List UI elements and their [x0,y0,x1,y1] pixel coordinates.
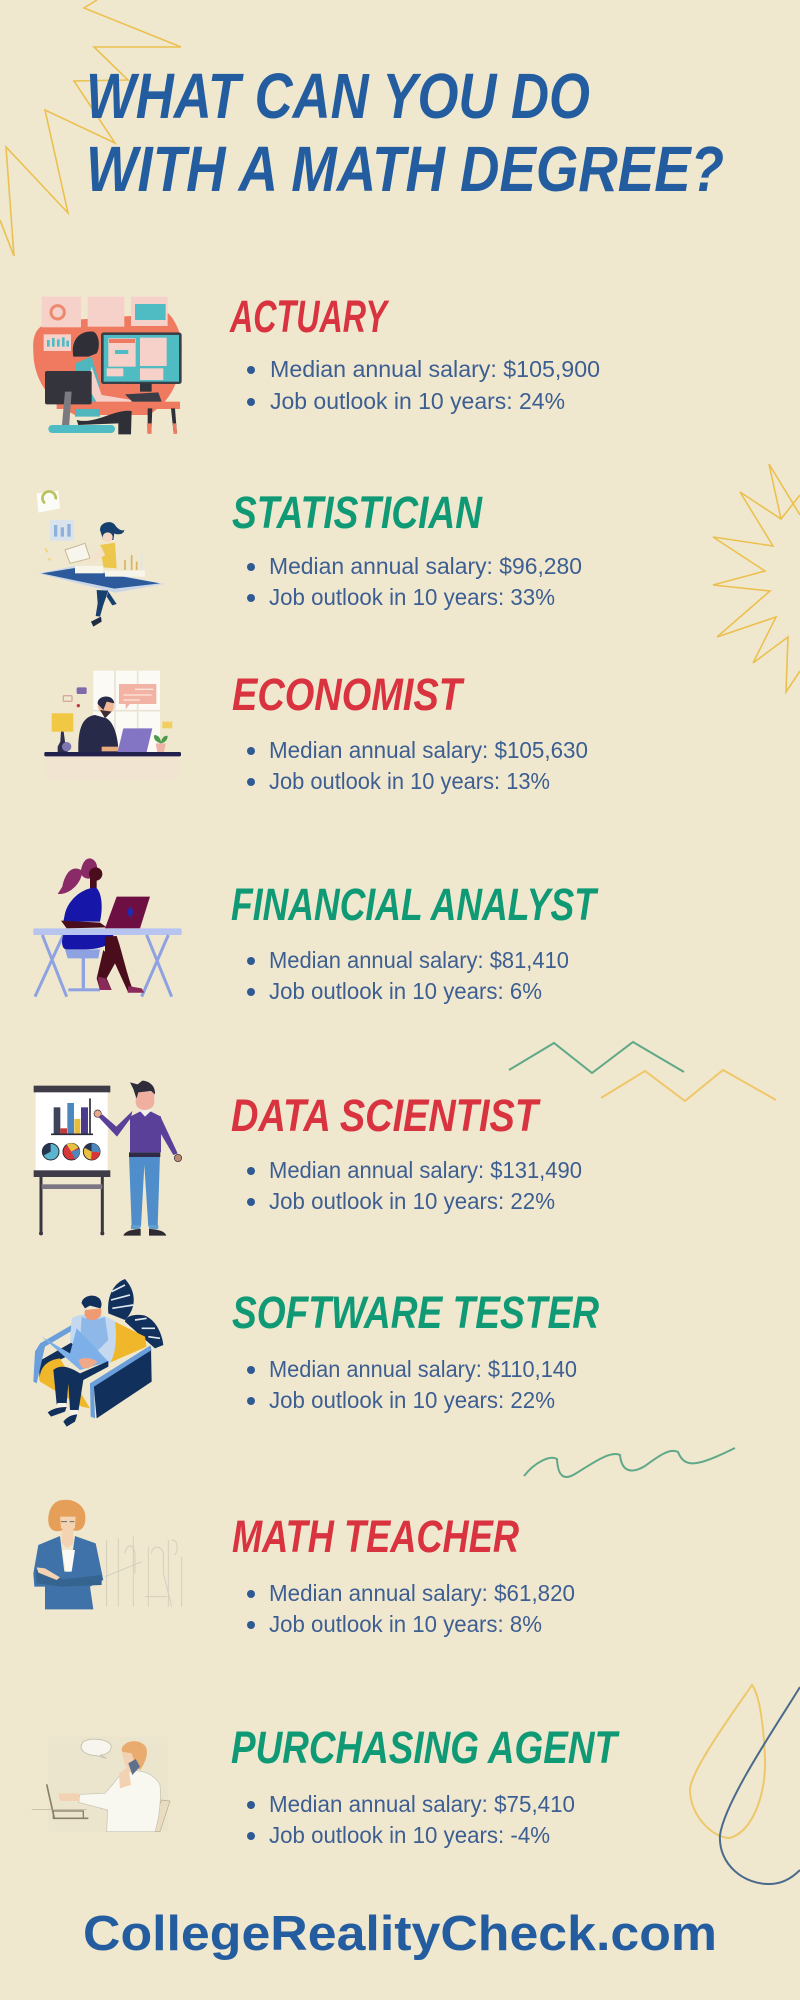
icon: person on sofa with laptop [33,1279,163,1427]
bullet list [247,737,588,794]
title: WHAT CAN YOU DO [86,60,590,132]
heading: MATH TEACHER [232,1511,519,1562]
bullet list: Job outlook in 10 years: -4% [269,1822,550,1848]
panel: actuary [33,291,600,434]
bullet list: Median annual salary: $81,410 [269,947,569,973]
bullet list: Job outlook in 10 years: 22% [269,1387,555,1413]
icon: teacher with crossed arms [33,1500,182,1609]
decoration: yellow zigzag top left [0,0,181,256]
heading: ACTUARY [229,291,390,342]
bullet list: Median annual salary: $61,820 [269,1580,575,1606]
heading: FINANCIAL ANALYST [231,879,599,930]
bullet list [247,1791,575,1848]
icon: woman at floating desk [37,491,164,627]
panel: financial analyst [33,858,599,1004]
panel: statistician [37,487,582,627]
icon: man on phone at laptop [32,1737,170,1832]
heading: PURCHASING AGENT [231,1722,620,1773]
heading: SOFTWARE TESTER [232,1287,599,1338]
icon: woman at computer [33,297,182,434]
heading: ECONOMIST [232,669,465,720]
icon: man presenting charts [34,1081,182,1236]
decoration: yellow teardrop and blue curve [690,1685,800,1884]
bullet list: Median annual salary: $105,630 [269,737,588,763]
panel: data scientist [34,1081,582,1236]
bullet list: Job outlook in 10 years: 33% [269,584,555,610]
bullet list: Median annual salary: $131,490 [269,1157,582,1183]
panel: economist [44,669,588,794]
bullet list [247,1157,582,1214]
bullet list [247,1580,575,1637]
icon: woman with ponytail at desk [33,858,182,997]
icon: man at laptop by window [44,671,181,778]
bullet list: Job outlook in 10 years: 24% [270,388,565,414]
decoration: green and yellow mountains [509,1042,776,1101]
bullet list [247,553,582,610]
bullet list: Median annual salary: $105,900 [270,356,600,382]
panel: software tester [33,1279,599,1427]
bullet list: Median annual salary: $75,410 [269,1791,575,1817]
bullet list [247,356,600,414]
panel: math teacher [33,1500,575,1637]
decoration: green squiggle [524,1448,735,1477]
bullet list: Median annual salary: $96,280 [269,553,582,579]
bullet list: Job outlook in 10 years: 13% [269,768,550,794]
bullet list: Median annual salary: $110,140 [269,1356,577,1382]
bullet list: Job outlook in 10 years: 6% [269,978,542,1004]
decoration: yellow starburst right [713,464,800,692]
footer website: CollegeRealityCheck.com [83,1907,717,1961]
bullet list: Job outlook in 10 years: 22% [269,1188,555,1214]
bullet list [247,947,569,1004]
title [86,60,724,205]
bullet list: Job outlook in 10 years: 8% [269,1611,542,1637]
heading: STATISTICIAN [232,487,483,538]
panel: purchasing agent [32,1722,620,1848]
bullet list [247,1356,577,1413]
heading: DATA SCIENTIST [231,1090,541,1141]
